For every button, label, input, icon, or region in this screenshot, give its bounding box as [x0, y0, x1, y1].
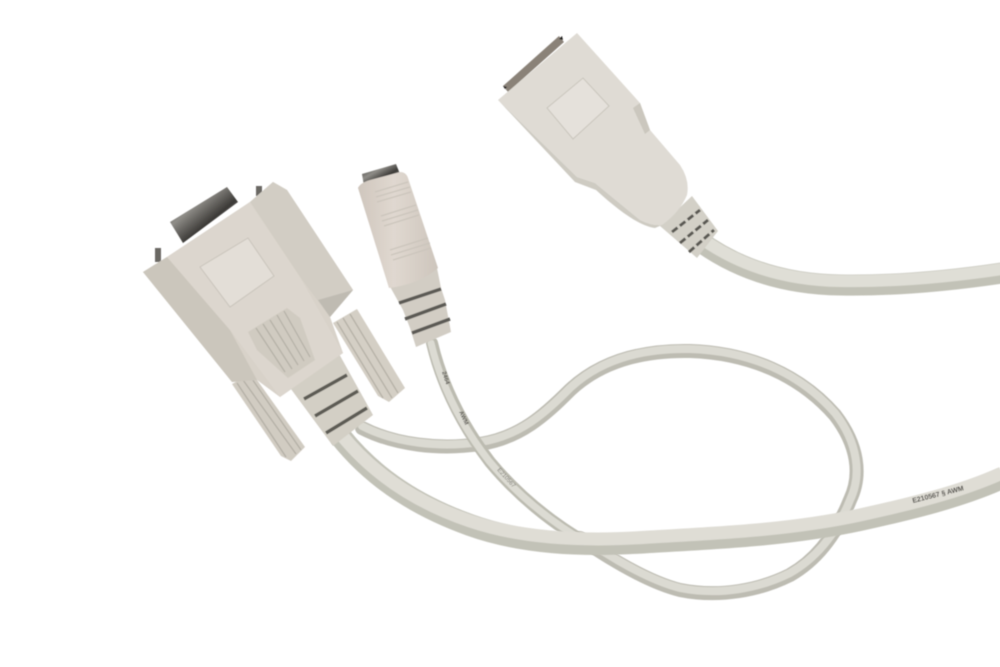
cable print: main cable markings: E210567 § AWM [912, 485, 965, 505]
housing [498, 33, 688, 225]
label window [547, 78, 609, 139]
metal contact edge [503, 36, 564, 92]
thumbscrew: right [333, 309, 405, 402]
cable: thin cable from mini-DIN socket [431, 343, 590, 545]
cable print: mini-DIN cable markings: 2464 [440, 371, 450, 386]
label window [200, 238, 274, 307]
cable: thin cable from mini-DIN socket: E210567 [496, 467, 516, 490]
connector: flat plug upper right [498, 33, 718, 258]
screw tips [155, 186, 262, 262]
ribbed grip [248, 308, 315, 378]
thumbscrew: left [232, 373, 305, 461]
strain relief [660, 196, 718, 258]
strain relief [288, 352, 373, 446]
metal shell [170, 187, 238, 243]
housing [143, 182, 353, 397]
cable: main thick cable [340, 433, 1000, 544]
connector: mini-DIN socket [358, 164, 451, 347]
metal collar [362, 164, 400, 186]
cable: looped cable from D-sub connector [362, 349, 857, 593]
cable: thin cable from mini-DIN socket: AWM [457, 410, 469, 426]
connector: D-sub serial plug [143, 182, 405, 461]
cable: upper-right cable [698, 236, 1000, 285]
barrel [358, 172, 438, 288]
strain relief [388, 268, 451, 347]
